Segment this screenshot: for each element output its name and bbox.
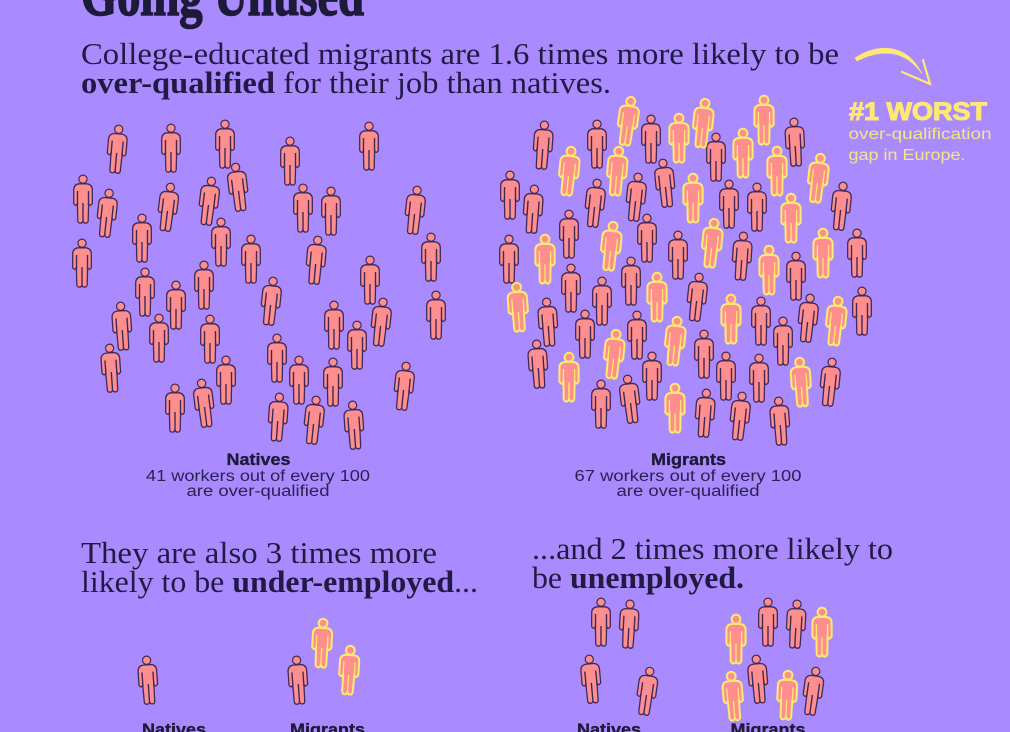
- label: migrants: 67 workers out of every 100: [574, 468, 802, 485]
- pictogram: unemployed natives: [580, 598, 660, 716]
- callout: worst gap: [848, 98, 992, 164]
- label: natives: 41 workers out of every 100: [146, 468, 370, 485]
- text: under-employed: [81, 535, 478, 599]
- callout: worst gap: over-qualification: [848, 126, 992, 143]
- text: unemployed: ...and 2 times more likely to: [532, 531, 893, 566]
- labels: bottom row: [142, 721, 806, 732]
- label: natives: Natives: [226, 451, 290, 469]
- pictogram: migrants: [500, 96, 871, 446]
- label: natives: [146, 451, 370, 500]
- intro text: [81, 36, 839, 100]
- text: under-employed: likely to be under-employed...: [81, 564, 478, 599]
- intro text: College-educated migrants are 1.6 times more likely to be: [81, 36, 839, 71]
- pictogram: unemployed migrants: [721, 598, 832, 721]
- pictogram: natives: [73, 120, 445, 450]
- label: migrants: [574, 451, 802, 500]
- intro text: over-qualified for their job than natives.: [81, 65, 611, 100]
- label: migrants: Migrants: [651, 451, 726, 469]
- callout: worst gap: #1 WORST: [849, 98, 987, 126]
- label: migrants: are over-qualified: [616, 483, 760, 500]
- arrow: [855, 48, 930, 84]
- text: under-employed: They are also 3 times more: [81, 535, 437, 570]
- text: unemployed: be unemployed.: [532, 560, 744, 595]
- text: unemployed: [532, 531, 893, 595]
- pictogram: under-employed migrants: [287, 618, 360, 705]
- callout: worst gap: gap in Europe.: [848, 147, 966, 164]
- label: natives: are over-qualified: [186, 483, 330, 500]
- pictogram: under-employed natives: [137, 656, 159, 705]
